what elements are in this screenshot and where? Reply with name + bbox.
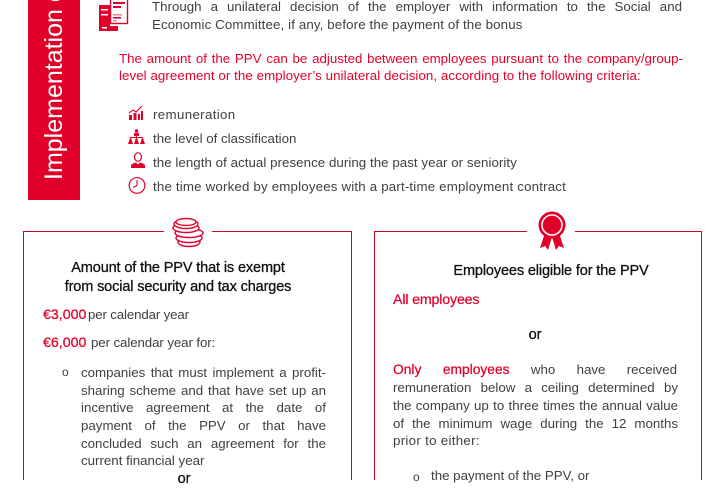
text: 3000: per calendar year [88, 307, 189, 322]
text: companies: companies that must implement a profit- [81, 365, 326, 380]
text: 6000: per calendar year for: [91, 335, 215, 350]
text: adjustment criteria intro: The amount of the PPV can be adjusted between employees pursuant to the company/group- [119, 51, 683, 66]
list: criteria [128, 106, 566, 194]
icon: coins [172, 218, 204, 248]
text: companies: payment of the PPV or that have [81, 418, 326, 433]
icon: person [131, 152, 145, 168]
icon: hierarchy [128, 129, 145, 144]
text: time worked: the time worked by employees with a part-time employment contract [153, 179, 566, 194]
panel border [23, 231, 352, 480]
text: only employees [393, 362, 678, 448]
text: or: or [529, 327, 541, 343]
text: only employees: of the minimum wage during the 12 months [393, 416, 678, 431]
text: unilateral decision: Economic Committee, if any, before the payment of the bonus [152, 17, 522, 32]
heading: amount line 2: from social security and tax charges [65, 279, 291, 295]
text: companies: concluded such an agreement for the [81, 436, 326, 451]
text: companies [81, 365, 326, 468]
text: only employees: remuneration below a ceiling determined by [393, 380, 678, 395]
text: companies: current financial year [81, 453, 204, 468]
text: only employees: the company up to three times the annual value [393, 398, 678, 413]
text: payment: the payment of the PPV, or [431, 468, 589, 483]
heading: employees eligible: Employees eligible for the PPV [453, 263, 649, 279]
text: only employees: Only employees who have received [393, 362, 677, 377]
panel border [374, 231, 702, 480]
text: unilateral decision [152, 0, 682, 32]
text: 3000 [43, 307, 189, 323]
text: companies: incentive agreement at the date of [81, 400, 326, 415]
panel: implementation title band [28, 0, 80, 200]
text: 6000: €6,000 [43, 335, 86, 351]
text: remuneration: remuneration [153, 107, 236, 122]
text: 3000: €3,000 [43, 307, 86, 323]
icon: documents [99, 0, 128, 31]
icon: rosette [538, 212, 566, 250]
text: presence: the length of actual presence during the past year or seniority [153, 155, 517, 170]
panel: eligible employees [374, 212, 702, 484]
text: only employees: prior to either: [393, 433, 480, 448]
text: bullet: o [62, 365, 69, 379]
icon: remuneration chart [128, 106, 143, 120]
text: companies: sharing scheme and that have set up an [81, 383, 326, 398]
text: 6000 [43, 335, 215, 351]
text: adjustment criteria intro [119, 51, 683, 83]
text: or: or [178, 471, 190, 487]
text: all employees: All employees [393, 292, 479, 308]
text: adjustment criteria intro: level agreement or the employer’s unilateral decision, according to the following criteria: [119, 68, 641, 83]
heading: amount: Amount of the PPV that is exempt [71, 260, 285, 276]
icon: clock [128, 177, 146, 194]
text: classification: the level of classification [153, 131, 296, 146]
panel: amount exempt [23, 218, 352, 487]
text: bullet: o [413, 470, 420, 484]
